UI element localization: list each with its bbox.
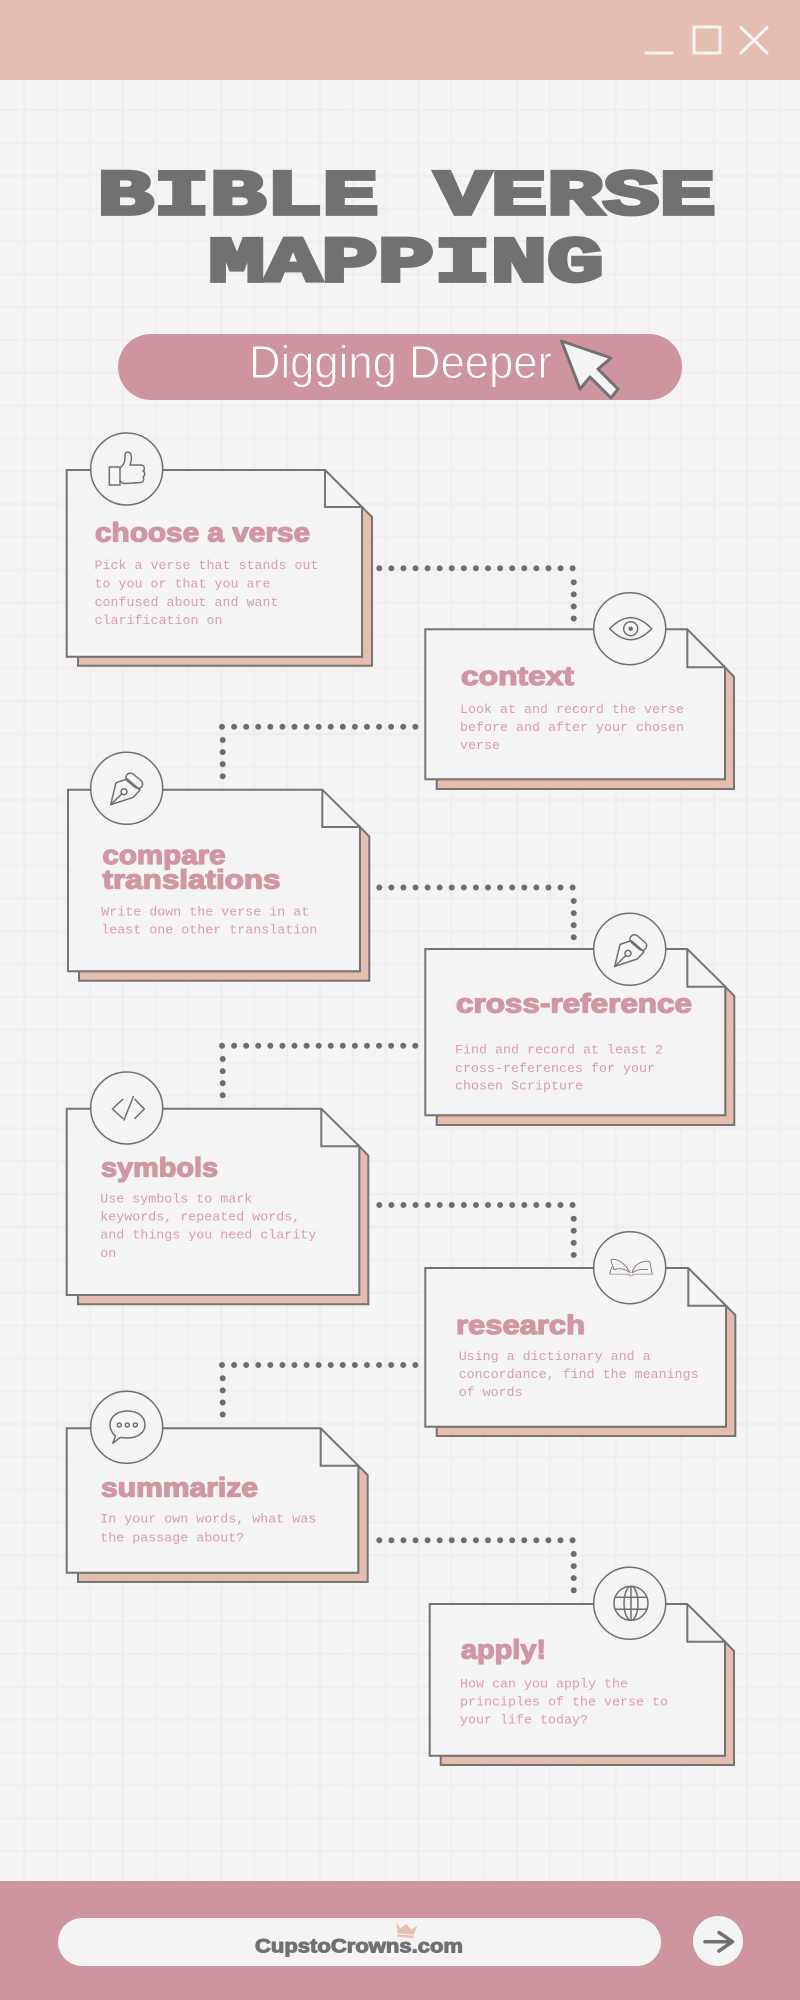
title: BIBLE VERSE xyxy=(98,162,716,234)
body text xyxy=(460,703,684,754)
icon: arrow xyxy=(705,1932,732,1951)
dotted connector 6 xyxy=(222,1365,415,1416)
body text: of words xyxy=(459,1386,523,1401)
body text: keywords, repeated words, xyxy=(100,1211,300,1226)
header bar xyxy=(0,0,800,80)
panel: choose a verse xyxy=(67,433,372,666)
dotted connector 1 xyxy=(379,568,574,620)
heading: translations xyxy=(102,864,280,894)
heading: summarize xyxy=(101,1473,258,1503)
title xyxy=(98,162,716,301)
body text: In your own words, what was xyxy=(100,1513,316,1528)
body text xyxy=(455,1044,663,1094)
heading: choose a verse xyxy=(95,518,310,548)
body text xyxy=(94,559,318,629)
body text: Look at and record the verse xyxy=(460,703,684,718)
icon: pen nib xyxy=(615,933,648,966)
body text xyxy=(460,1678,668,1728)
panel: cross-reference xyxy=(425,913,734,1125)
heading: research xyxy=(456,1310,585,1340)
icon: eye xyxy=(610,618,652,640)
icon: cursor arrow xyxy=(562,341,618,398)
heading: compare xyxy=(102,840,226,870)
dotted connector 4 xyxy=(222,1046,415,1096)
body text: Use symbols to mark xyxy=(100,1193,252,1208)
body text xyxy=(101,906,317,938)
heading: context xyxy=(461,661,574,691)
body text: and things you need clarity xyxy=(100,1229,316,1244)
window controls xyxy=(646,27,767,53)
body text: confused about and want xyxy=(94,596,278,611)
icon: globe xyxy=(614,1586,648,1620)
website pill xyxy=(58,1918,661,1966)
panel: summarize xyxy=(67,1391,368,1582)
body text: Pick a verse that stands out xyxy=(94,559,318,574)
body text: Write down the verse in at xyxy=(101,906,309,920)
title: MAPPING xyxy=(208,229,604,301)
icon: pen nib xyxy=(111,771,144,805)
body text xyxy=(459,1350,699,1401)
dotted connector 3 xyxy=(379,888,574,938)
heading: symbols xyxy=(101,1153,218,1183)
heading: apply! xyxy=(461,1634,546,1664)
icon: code brackets xyxy=(112,1097,144,1120)
body text: to you or that you are xyxy=(94,577,270,592)
footer bar xyxy=(0,1881,800,2000)
body text: cross-references for your xyxy=(455,1062,655,1077)
body text: the passage about? xyxy=(100,1532,244,1546)
heading xyxy=(102,840,280,894)
icon: crown xyxy=(395,1923,417,1938)
body text: chosen Scripture xyxy=(455,1080,583,1094)
body text: before and after your chosen xyxy=(460,721,684,736)
body text xyxy=(100,1513,316,1546)
body text: clarification on xyxy=(94,614,222,629)
panel: research xyxy=(425,1232,735,1436)
dotted connector 7 xyxy=(379,1540,574,1591)
body text: your life today? xyxy=(460,1714,588,1728)
icon: open book xyxy=(610,1259,652,1276)
body text: least one other translation xyxy=(101,924,317,938)
heading: cross-reference xyxy=(456,989,692,1019)
body text: concordance, find the meanings xyxy=(459,1368,699,1383)
body text: Find and record at least 2 xyxy=(455,1044,663,1058)
body text: verse xyxy=(460,739,500,754)
panel: context xyxy=(425,593,734,789)
arrow button xyxy=(693,1916,743,1966)
icon: speech bubble xyxy=(110,1411,145,1443)
body text xyxy=(100,1193,316,1262)
body text: principles of the verse to xyxy=(460,1696,668,1710)
body text: on xyxy=(100,1247,116,1262)
dotted connector 5 xyxy=(379,1205,574,1256)
dotted connector 2 xyxy=(222,727,415,777)
subtitle pill xyxy=(118,334,682,400)
icon: thumbs up xyxy=(109,452,145,485)
panel: compare translations xyxy=(68,752,369,981)
panel: symbols xyxy=(67,1072,368,1304)
body text: How can you apply the xyxy=(460,1678,628,1692)
body text: Using a dictionary and a xyxy=(459,1350,651,1365)
website text: CupstoCrowns.com xyxy=(255,1937,463,1958)
subtitle pill: Digging Deeper xyxy=(249,336,552,388)
panel: apply xyxy=(430,1567,734,1765)
